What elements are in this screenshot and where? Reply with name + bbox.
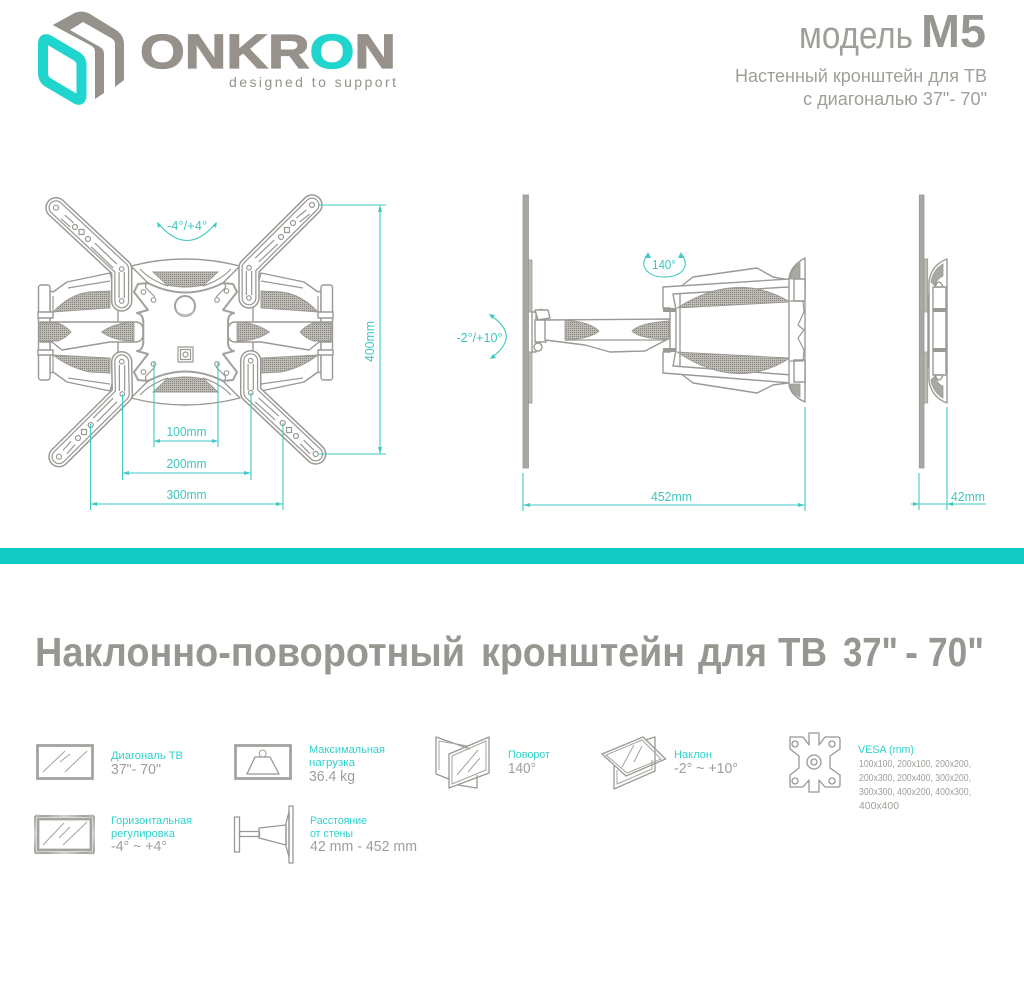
- spec: tilt: [602, 737, 738, 789]
- rotation arc -4/+4: -4°/+4°: [167, 218, 207, 233]
- main heading: 70": [928, 629, 984, 675]
- arm: bottom left: [56, 359, 125, 459]
- values: 200x300, 200x400, 300x200,: [859, 772, 971, 784]
- dimension 300mm: 300mm: [166, 487, 206, 502]
- model heading: [799, 5, 986, 57]
- logo mark: teal square: [43, 39, 82, 100]
- spec: TV diagonal: [38, 746, 183, 778]
- label: Поворот: [508, 749, 550, 761]
- logo tagline: designed to support: [229, 74, 396, 90]
- rotation arc -4/+4: [157, 218, 217, 240]
- extension arm: [545, 319, 670, 352]
- spec: horizontal adjustment: регулировка: [111, 828, 176, 840]
- value: 42 mm - 452 mm: [310, 839, 417, 855]
- arm frame: [663, 268, 805, 393]
- label: Наклон: [674, 749, 712, 761]
- icon: tilted screens: [602, 737, 666, 789]
- front view drawing: [38, 202, 333, 459]
- tilt arc -2/+10: [456, 314, 506, 359]
- values: 100x100, 200x100, 200x200,: [859, 758, 971, 770]
- main heading: для: [698, 629, 767, 675]
- main heading: [35, 629, 984, 675]
- main heading: -: [905, 629, 918, 675]
- TV plate: [919, 195, 924, 468]
- icon: swivel screens: [436, 737, 489, 788]
- centre plate: [134, 283, 237, 381]
- spec: swivel: [436, 737, 550, 788]
- wall-folded view drawing: [919, 195, 947, 468]
- label: Максимальная: [309, 744, 385, 756]
- arm: bottom right: [248, 358, 318, 456]
- dimension 400mm: 400mm: [362, 321, 377, 362]
- main heading: Наклонно-поворотный: [35, 629, 465, 675]
- value: 37"- 70": [111, 762, 161, 778]
- top arc: [131, 259, 240, 292]
- tilt bracket: [532, 310, 550, 352]
- wall mount body, right half: [228, 273, 333, 391]
- values: 300x300, 400x200, 400x300,: [859, 786, 971, 798]
- rotation arc 140°: [644, 252, 685, 277]
- dimension 100mm: [154, 362, 218, 447]
- dimension 42mm: 42mm: [951, 489, 985, 504]
- wall mount body, left half: [38, 273, 143, 391]
- product subtitle: с диагональю 37"- 70": [803, 89, 987, 109]
- icon: wall mount: [234, 806, 293, 863]
- spec: maximum load: нагрузка: [309, 757, 356, 769]
- label: Диагональ ТВ: [111, 750, 183, 762]
- main heading: кронштейн: [481, 629, 685, 675]
- label: Расстояние: [310, 815, 367, 827]
- spec: horizontal adjustment: [35, 815, 192, 855]
- value: -2° ~ +10°: [674, 761, 738, 777]
- dimension 452mm: 452mm: [651, 489, 692, 504]
- logo mark: grey bracket: [53, 12, 124, 99]
- arm: top left: [54, 205, 124, 303]
- dimension 452mm: [523, 407, 805, 511]
- spec: maximum load: [236, 744, 385, 785]
- bottom arc: [131, 372, 240, 405]
- main heading: 37": [843, 629, 898, 675]
- icon: screen: [38, 746, 92, 778]
- teal divider band: [0, 548, 1024, 564]
- adapters: [924, 259, 928, 403]
- tilt arc -2/+10: -2°/+10°: [456, 330, 502, 345]
- dimension 300mm: [90, 423, 283, 510]
- arm: top right: [247, 202, 314, 300]
- logo wordmark: ONKR ON: [140, 26, 396, 79]
- model label: модель: [799, 15, 913, 57]
- product subtitle: Настенный кронштейн для ТВ: [735, 66, 987, 86]
- logo: ONKRON: [43, 12, 396, 100]
- value: 140°: [508, 761, 536, 777]
- spec: distance from wall: от стены: [310, 828, 353, 840]
- dimension 200mm: [122, 393, 251, 480]
- label: Горизонтальная: [111, 815, 192, 827]
- product subtitle: [735, 66, 987, 109]
- label: VESA (mm): [858, 744, 914, 756]
- dimension 400mm: [318, 205, 386, 454]
- value: -4° ~ +4°: [111, 839, 167, 855]
- rotation arc 140°: 140°: [652, 257, 676, 272]
- icon: weight: [236, 746, 290, 778]
- side view dimensions: [456, 252, 805, 511]
- icon: rotated screen: [35, 815, 94, 854]
- wall plate: [789, 258, 805, 402]
- values: [859, 758, 971, 812]
- main heading: ТВ: [778, 629, 827, 675]
- folded arm: [928, 259, 947, 403]
- TV plate: [523, 195, 528, 468]
- plate details: [141, 283, 229, 381]
- spec: VESA: [790, 733, 971, 812]
- lower adapter: [528, 352, 532, 403]
- side view drawing (arm extended): [523, 195, 805, 468]
- dimension 100mm: 100mm: [166, 424, 206, 439]
- spec: distance from wall: [234, 806, 417, 863]
- model number: М5: [921, 5, 986, 57]
- upper adapter: [528, 260, 532, 312]
- icon: VESA plate: [790, 733, 840, 792]
- value: 36.4 kg: [309, 769, 355, 785]
- front view dimensions: [90, 205, 386, 510]
- values: 400x400: [859, 800, 899, 812]
- dimension 42mm: [911, 407, 986, 510]
- dimension 200mm: 200mm: [166, 456, 206, 471]
